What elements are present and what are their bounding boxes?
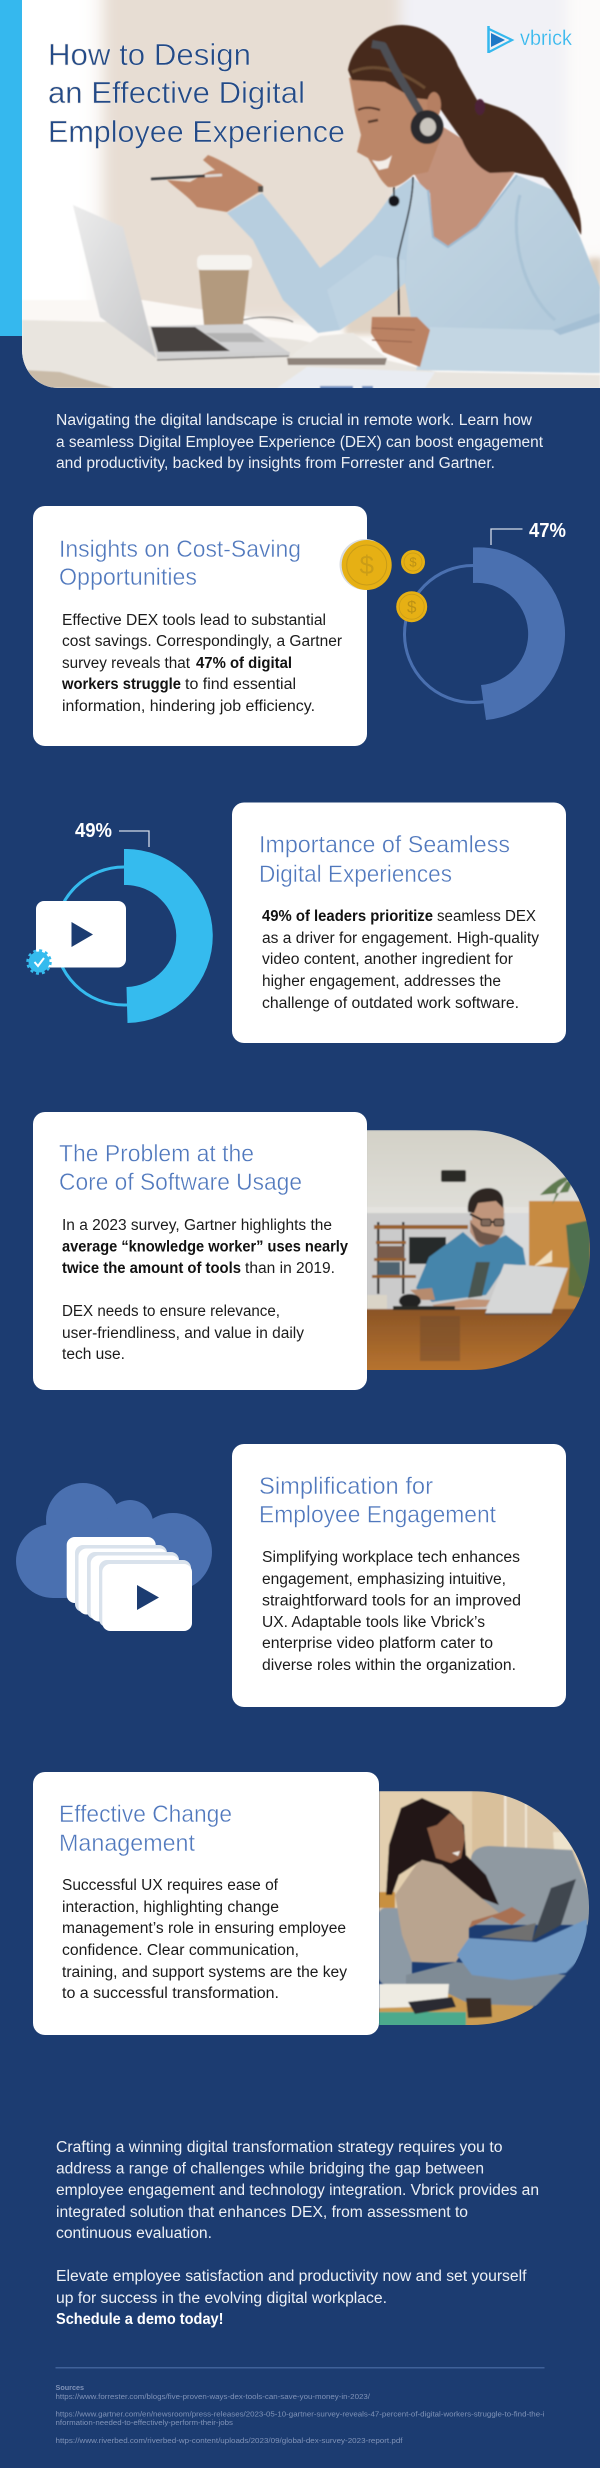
card background [232, 802, 566, 1043]
heading [259, 1473, 496, 1528]
body text: 49% of leaders prioritize [262, 908, 433, 925]
body text: confidence. Clear communication, [62, 1942, 299, 1959]
heading: The Problem at the [59, 1140, 254, 1168]
microphone and cable [388, 196, 400, 206]
door [529, 1201, 594, 1271]
closing text: employee engagement and technology integration. Vbrick provides an [56, 2182, 539, 2199]
card background [33, 1772, 379, 2035]
title: How to Design [48, 37, 251, 72]
divider line [56, 2367, 544, 2368]
neck and chest [413, 120, 515, 247]
heading [59, 1140, 302, 1196]
intro text: Navigating the digital landscape is crucial in remote work. Learn how [56, 412, 533, 429]
body text: to a successful transformation. [62, 1985, 279, 2002]
panel: seamless digital experiences [232, 802, 566, 1043]
man's neck and face [469, 1220, 498, 1248]
torso [404, 175, 600, 331]
laptop [73, 205, 156, 358]
left arm [227, 177, 413, 333]
icon: gold coins: $ [409, 554, 417, 570]
heading [259, 832, 510, 888]
card background [33, 506, 367, 746]
panel: simplification for engagement [232, 1444, 566, 1707]
body text: video content, another ingredient for [262, 951, 513, 968]
plant [540, 1177, 574, 1205]
heading: Management [59, 1830, 195, 1857]
headset ear cup [410, 110, 444, 144]
hands and mug [410, 1288, 435, 1300]
heading: Opportunities [59, 564, 197, 591]
donut chart: 47%: 47% [529, 520, 566, 542]
video cards [67, 1537, 192, 1631]
sources: https://www.gartner.com/en/newsroom/press-releases/2023-05-10-gartner-survey-reveals-47-percent-of-digital-workers-struggle-to-find-the-i [56, 2410, 545, 2418]
body text [62, 1877, 347, 2002]
title: Employee Experience [48, 114, 345, 149]
panel: core software usage problem [33, 1112, 367, 1390]
body text: than in 2019. [245, 1260, 335, 1277]
body text: user-friendliness, and value in daily [62, 1325, 304, 1342]
man's shirt [416, 1232, 526, 1302]
body text: workers struggle [61, 676, 181, 693]
closing text: address a range of challenges while bridging the gap between [56, 2160, 484, 2178]
body text: straightforward tools for an improved [262, 1592, 521, 1610]
body text: Effective DEX tools lead to substantial [62, 612, 326, 629]
body text [262, 908, 539, 1012]
body text: 47% of digital [196, 655, 292, 672]
closing text: integrated solution that enhances DEX, from assessment to [56, 2204, 468, 2221]
icon: gold coins: $ [359, 550, 374, 580]
panel: effective change management [33, 1772, 379, 2035]
hero photo: woman on video call at laptop [10, 0, 600, 389]
body text: Successful UX requires ease of [62, 1877, 279, 1894]
body text: seamless DEX [437, 908, 536, 925]
body text: tech use. [62, 1346, 125, 1363]
icon: gold coins [340, 539, 427, 622]
body text: information, hindering job efficiency. [62, 698, 315, 715]
donut chart: 47% [404, 520, 566, 720]
hands [469, 1907, 526, 1928]
intro text: and productivity, backed by insights from Forrester and Gartner. [56, 455, 495, 472]
headset band [372, 44, 420, 112]
glasses [470, 1214, 504, 1222]
title [48, 37, 345, 149]
table [23, 300, 286, 324]
sofa [470, 1846, 590, 1925]
raised hand [167, 155, 262, 212]
body text: twice the amount of tools [62, 1260, 241, 1277]
card background [33, 1112, 367, 1390]
body text: to find essential [185, 676, 296, 693]
vbrick logo [488, 26, 572, 53]
table [367, 1308, 574, 1370]
pen [151, 176, 205, 179]
blurred wall [100, 0, 559, 324]
body text: engagement, emphasizing intuitive, [262, 1571, 506, 1588]
heading: Employee Engagement [259, 1502, 496, 1528]
coffee table [379, 1993, 534, 2027]
sources [56, 2383, 545, 2445]
photo: man working at laptop [366, 1130, 596, 1372]
body text: DEX needs to ensure relevance, [62, 1303, 280, 1320]
body text: UX. Adaptable tools like Vbrick’s [262, 1614, 485, 1631]
body text: challenge of outdated work software. [262, 995, 519, 1012]
sources: https://www.forrester.com/blogs/five-proven-ways-dex-tools-can-save-you-money-in-2023/ [56, 2392, 371, 2401]
closing text: up for success in the evolving digital workplace. [56, 2290, 387, 2307]
heading [59, 1801, 232, 1857]
body text: as a driver for engagement. High-quality [262, 930, 539, 947]
face [427, 1813, 465, 1863]
heading: Importance of Seamless [259, 832, 510, 858]
body text: diverse roles within the organization. [262, 1657, 516, 1674]
closing text: Crafting a winning digital transformation strategy requires you to [56, 2139, 502, 2156]
jeans [457, 1919, 587, 1980]
closing text: continuous evaluation. [56, 2225, 212, 2242]
body text [62, 1217, 348, 1363]
body text: average “knowledge worker” uses nearly [62, 1238, 348, 1256]
body text: Simplifying workplace tech enhances [262, 1549, 520, 1566]
laptop [485, 1264, 568, 1314]
laptop [481, 1923, 536, 1941]
curly hair [386, 1798, 499, 1905]
icon: cloud with stacked videos [16, 1483, 212, 1631]
body text: survey reveals that [62, 655, 191, 672]
body text: interaction, highlighting change [62, 1899, 279, 1916]
body text: training, and support systems are the key [62, 1964, 347, 1981]
face [349, 75, 440, 187]
man's hair [468, 1188, 503, 1213]
panel: cost-saving insights [33, 506, 367, 746]
vbrick logo: vbrick [520, 26, 572, 50]
body text: management’s role in ensuring employee [62, 1920, 346, 1937]
sources: https://www.riverbed.com/riverbed-wp-content/uploads/2023/09/global-dex-survey-2023-report.pdf [56, 2436, 403, 2445]
ceiling light [441, 1170, 466, 1182]
scrunchie [475, 99, 485, 115]
wall [379, 1791, 594, 1921]
coffee cup [199, 270, 249, 325]
closing text [56, 2139, 539, 2328]
body text: enterprise video platform cater to [262, 1635, 493, 1652]
closing text: Elevate employee satisfaction and productivity now and set yourself [56, 2268, 527, 2285]
heading: Effective Change [59, 1801, 232, 1828]
sources: nformation-needed-to-effectively-perform-their-jobs [56, 2418, 233, 2427]
heading: Core of Software Usage [59, 1169, 302, 1196]
donut chart: 49%: 49% [75, 820, 112, 842]
shelves [377, 1222, 380, 1294]
cloud [16, 1483, 212, 1598]
icon: gold coins: $ [407, 598, 417, 616]
hand holding cable [371, 317, 430, 367]
heading: Digital Experiences [259, 861, 452, 888]
card background [232, 1444, 566, 1707]
ear [427, 92, 441, 118]
sources: Sources [56, 2383, 84, 2392]
sweater [395, 1860, 499, 1963]
intro text: a seamless Digital Employee Experience (DEX) can boost engagement [56, 434, 544, 451]
closing text: Schedule a demo today! [56, 2311, 224, 2328]
hair [348, 25, 581, 235]
donut chart: 49% [55, 820, 213, 1023]
photo: woman on sofa with laptop [379, 1791, 594, 2027]
television [409, 1237, 446, 1264]
heading: Simplification for [259, 1473, 433, 1500]
heading: Insights on Cost-Saving [59, 536, 301, 563]
body text: In a 2023 survey, Gartner highlights the [62, 1217, 332, 1234]
hero accent strip [0, 0, 22, 336]
icon: video player with verified badge [28, 901, 126, 974]
heading [59, 536, 301, 591]
intro text [56, 412, 544, 472]
body text [262, 1549, 521, 1674]
body text: cost savings. Correspondingly, a Gartner [62, 633, 342, 650]
title: an Effective Digital [48, 75, 305, 110]
paper and notebook [277, 367, 435, 388]
body text [61, 612, 342, 715]
body text: higher engagement, addresses the [262, 973, 501, 990]
forearm [416, 322, 600, 373]
